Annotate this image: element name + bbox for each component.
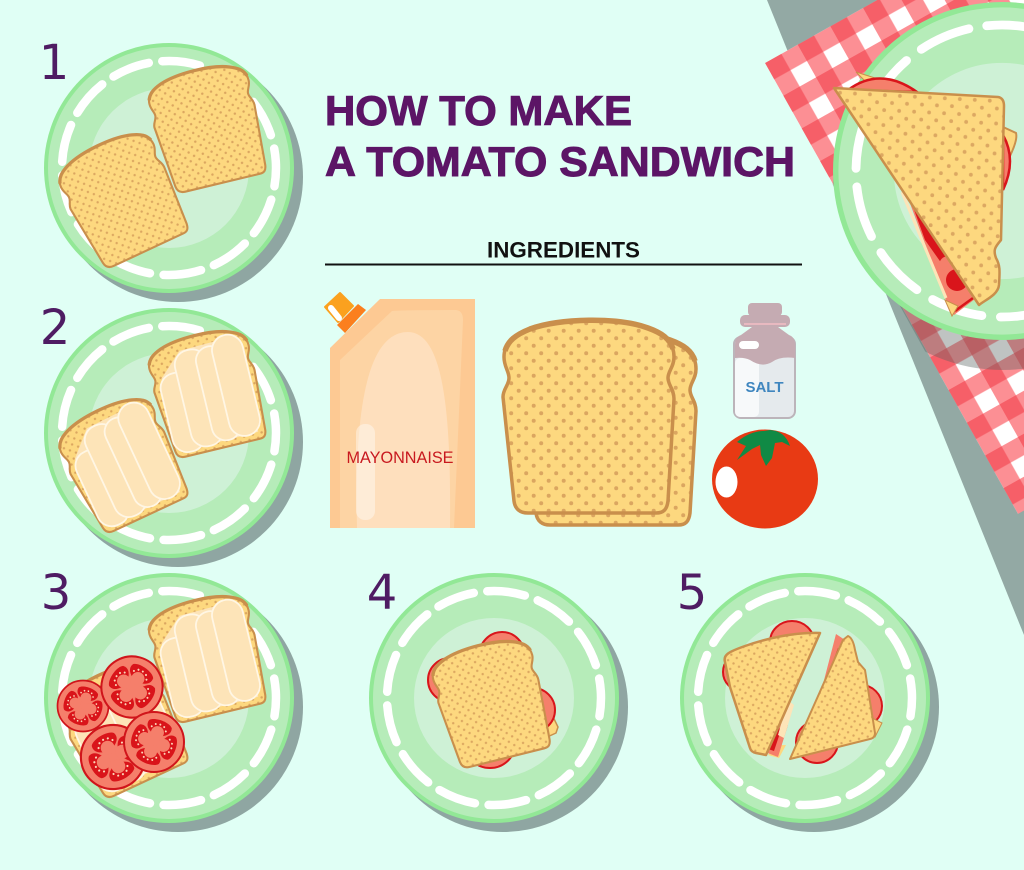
closed sandwich <box>427 632 558 771</box>
ingredient: tomato <box>712 430 818 528</box>
number 1: 1 <box>39 35 69 91</box>
ingredient: mayonnaise pouch: MAYONNAISE <box>346 449 454 467</box>
number 3: 3 <box>41 565 71 621</box>
finished sandwich on big plate <box>833 2 1024 340</box>
title: HOW TO MAKE <box>325 87 632 134</box>
number 2: 2 <box>40 300 70 356</box>
step 5 <box>677 565 939 832</box>
number 5: 5 <box>677 565 707 621</box>
plate 5 <box>680 573 939 832</box>
cut sandwich <box>723 621 882 763</box>
bread slice <box>51 124 193 272</box>
ingredients heading: INGREDIENTS <box>487 238 640 262</box>
mayo bread slice <box>144 324 270 460</box>
mayo bread slice <box>144 589 270 725</box>
title <box>325 87 795 185</box>
ingredient: mayonnaise pouch <box>325 293 475 528</box>
step 2 <box>40 300 303 567</box>
mayo bread under tomatoes <box>51 654 193 802</box>
ingredient: salt shaker: SALT <box>745 379 784 396</box>
ingredient: salt shaker <box>734 303 795 418</box>
ingredient: bread slices <box>503 320 696 525</box>
checkered tablecloth <box>765 0 1024 514</box>
step 4 <box>367 565 628 832</box>
step 1 <box>39 35 303 302</box>
table shadow strip <box>767 0 1024 635</box>
plate 2 <box>44 308 303 567</box>
sandwich filling <box>902 192 975 316</box>
big plate <box>833 2 1024 340</box>
number 4: 4 <box>367 565 397 621</box>
tomato slices <box>58 650 184 802</box>
mayo bread slice <box>51 389 193 537</box>
plate shadow on tablecloth <box>832 180 1024 370</box>
bread slice <box>144 59 270 195</box>
plate 4 <box>369 573 628 832</box>
title: A TOMATO SANDWICH <box>325 138 795 185</box>
tomato behind sandwich <box>848 72 1016 190</box>
plate 1 <box>44 43 303 302</box>
sandwich triangle <box>834 88 1004 305</box>
step 3 <box>41 565 303 832</box>
plate 3 <box>44 573 303 832</box>
